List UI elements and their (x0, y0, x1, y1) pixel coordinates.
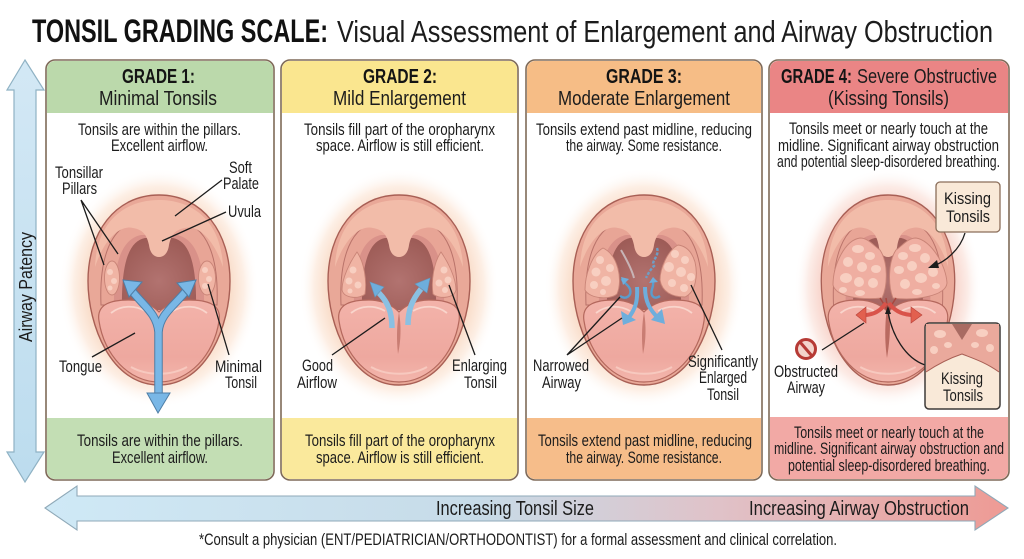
arrow: increasing tonsil size and airway obstruction (45, 486, 1008, 530)
title: TONSIL GRADING SCALE: (32, 13, 328, 49)
header: grade 2: GRADE 2: (363, 65, 437, 88)
header: grade 3 (527, 61, 761, 113)
labels: grade 2: Enlarging (452, 357, 507, 375)
inset: kissing tonsils close-up (885, 306, 1000, 409)
tongue groove (397, 312, 401, 354)
tongue groove (885, 300, 890, 358)
tongue (828, 300, 948, 382)
label: obstructed airway (774, 323, 864, 397)
arrow: increasing tonsil size and airway obstruction: Increasing Tonsil Size (436, 498, 594, 520)
title (32, 13, 993, 49)
footer: grade 3: the airway. Some resistance. (566, 449, 722, 467)
description: grade 2 (304, 121, 496, 155)
description: grade 1 (78, 121, 241, 155)
callout: kissing tonsils (928, 182, 1000, 268)
header: grade 4: (Kissing Tonsils) (828, 87, 949, 110)
header: grade 1: GRADE 1: (122, 65, 195, 88)
obstructed airflow arrows (856, 298, 922, 323)
footer: grade 3: Tonsils extend past midline, reducing (538, 432, 752, 450)
labels: grade 2: Airflow (297, 374, 337, 392)
labels: grade 2 (297, 285, 507, 392)
enlarged tonsils (585, 245, 696, 298)
labels: grade 1: Pillars (62, 180, 97, 198)
airflow arrows (370, 278, 430, 328)
header: grade 1: Minimal Tonsils (99, 87, 217, 110)
labels: grade 2: Tonsil (464, 374, 497, 392)
restricted airflow arrows (620, 248, 665, 325)
footer: grade 2: space. Airflow is still efficient. (316, 449, 484, 467)
inset: kissing tonsils close-up: Tonsils (943, 387, 983, 405)
header: grade 4 (770, 61, 1008, 113)
arrow: airway patency axis: Airway Patency (15, 231, 36, 342)
label: obstructed airway: Airway (787, 379, 826, 397)
footnote: *Consult a physician (ENT/PEDIATRICIAN/ORTHODONTIST) for a formal assessment and clinical correlation. (199, 531, 837, 549)
minimal tonsils (104, 261, 216, 295)
icon: no airflow symbol (796, 340, 816, 358)
labels: grade 2: Good (302, 357, 333, 375)
callout: kissing tonsils: Tonsils (946, 208, 990, 226)
description: grade 1: Excellent airflow. (111, 137, 208, 155)
footer: grade 4 (770, 417, 1008, 479)
description: grade 3 (536, 121, 752, 155)
header: grade 2 (282, 61, 517, 113)
description: grade 3: the airway. Some resistance. (566, 137, 722, 155)
footer: grade 1: Excellent airflow. (112, 449, 208, 467)
inset: kissing tonsils close-up: Kissing (941, 370, 983, 388)
illustration: grade 3 mouth (544, 168, 744, 408)
panel: grade 1 (46, 60, 274, 480)
labels: grade 1: Tonsillar (55, 164, 103, 182)
illustration: grade 1 mouth (59, 168, 259, 413)
footer: grade 3 (527, 418, 761, 479)
labels: grade 3: Tonsil (707, 386, 739, 404)
labels: grade 1: Palate (223, 175, 259, 193)
tongue (339, 300, 459, 382)
footer: grade 2 (282, 418, 517, 479)
header: grade 3: Moderate Enlargement (558, 87, 730, 110)
header: grade 3: GRADE 3: (606, 65, 682, 88)
description: grade 4 (777, 120, 1000, 171)
labels: grade 1: Tongue (59, 358, 102, 376)
description: grade 3: Tonsils extend past midline, reducing (536, 121, 752, 139)
panel: grade 2 (281, 60, 518, 480)
description: grade 1: Tonsils are within the pillars. (78, 121, 241, 139)
labels: grade 3: Significantly (688, 353, 759, 371)
labels: grade 1 (55, 159, 262, 392)
panel: grade 3 (526, 60, 762, 480)
labels: grade 3: Narrowed (533, 357, 589, 375)
illustration: grade 2 mouth (299, 168, 499, 408)
description: grade 2: Tonsils fill part of the oropharynx (304, 121, 496, 139)
labels: grade 1: Minimal (215, 358, 262, 376)
enlarging tonsils (342, 252, 456, 297)
label: obstructed airway: Obstructed (774, 363, 838, 381)
labels: grade 1: Uvula (228, 203, 262, 221)
header: grade 1 (47, 61, 273, 113)
tongue (584, 300, 704, 382)
description: grade 2: space. Airflow is still efficient. (316, 137, 484, 155)
kissing tonsils (833, 238, 947, 299)
tongue (99, 300, 219, 382)
labels: grade 3: Airway (542, 374, 582, 392)
labels: grade 3: Enlarged (699, 369, 747, 387)
footer: grade 1: Tonsils are within the pillars. (77, 432, 243, 450)
header: grade 4: GRADE 4: (781, 65, 852, 88)
footer: grade 1 (47, 418, 273, 479)
labels: grade 1: Soft (229, 159, 252, 177)
airflow arrow (123, 280, 196, 413)
labels: grade 1: Tonsil (225, 374, 257, 392)
callout: kissing tonsils: Kissing (944, 190, 991, 208)
arrow: airway patency axis (7, 60, 44, 482)
header: grade 2: Mild Enlargement (333, 87, 466, 110)
labels: grade 3 (533, 285, 759, 404)
footer: grade 2: Tonsils fill part of the oropharynx (305, 432, 496, 450)
tongue groove (642, 312, 646, 354)
illustration: grade 4 mouth (794, 168, 982, 408)
arrow: increasing tonsil size and airway obstruction: Increasing Airway Obstruction (749, 498, 969, 520)
panel: grade 4 (769, 60, 1009, 480)
